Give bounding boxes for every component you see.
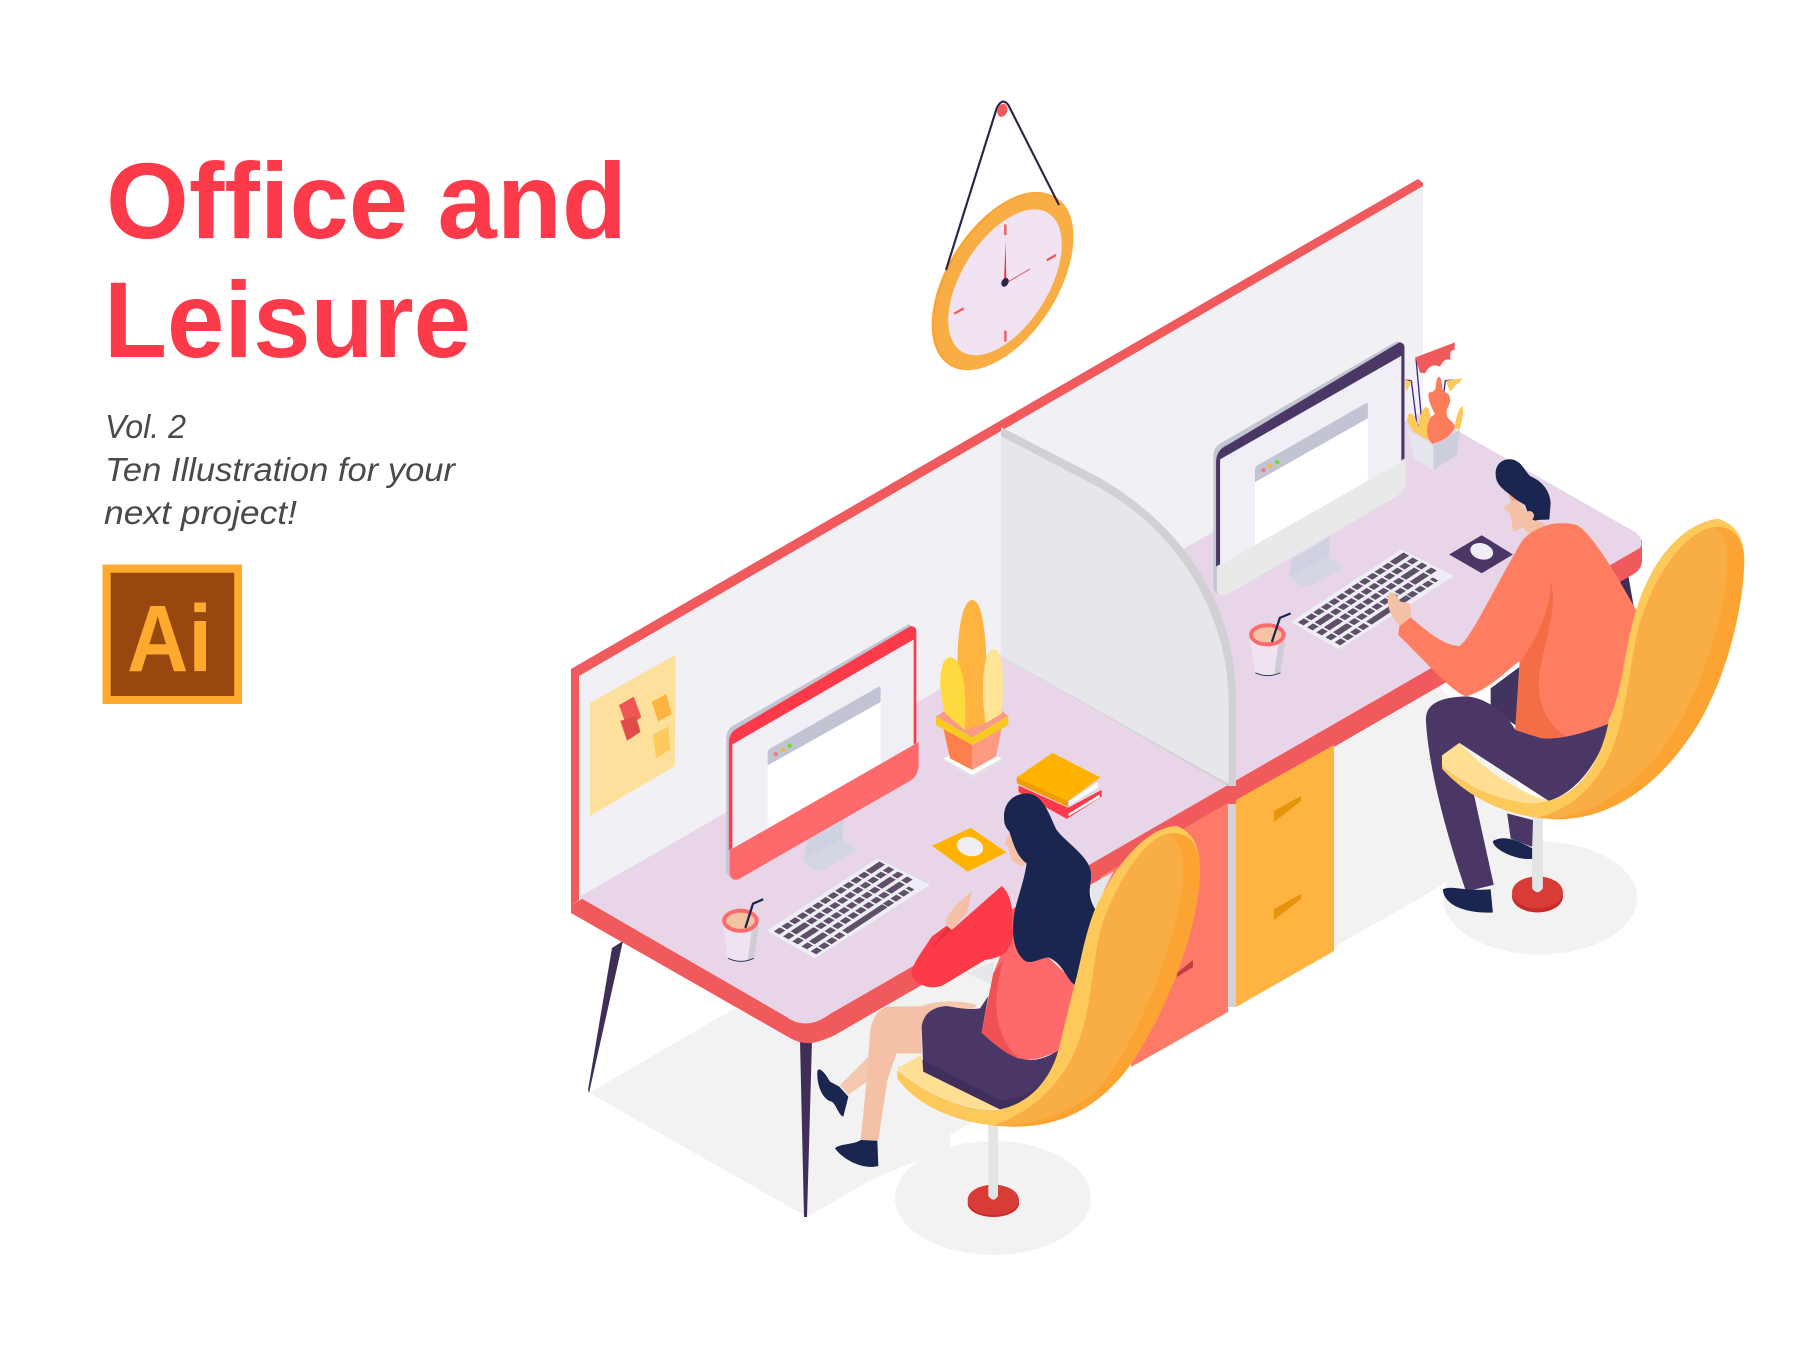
wall clock — [903, 102, 1102, 394]
chair shell — [1442, 519, 1744, 819]
blouse — [982, 923, 1078, 1060]
back wall — [579, 184, 1423, 897]
sleeve — [912, 886, 1013, 987]
chair shell — [897, 826, 1200, 1127]
partition panel — [1001, 427, 1236, 786]
books — [1017, 753, 1102, 819]
drink cup — [722, 899, 763, 961]
near lower leg and shoe — [1426, 720, 1494, 913]
seat — [897, 1055, 1000, 1109]
sweater — [1398, 523, 1640, 739]
right keyboard — [1291, 549, 1454, 649]
left workstation objects — [590, 624, 1102, 961]
hair — [1004, 793, 1097, 985]
seat — [1442, 743, 1549, 804]
subtitle text: Vol. 2 — [105, 408, 186, 445]
man in chair — [1388, 519, 1744, 913]
purple monitor — [1213, 341, 1406, 595]
left keyboard — [767, 858, 930, 958]
subtitle text: next project! — [104, 494, 297, 531]
trousers — [1426, 666, 1613, 801]
face — [1005, 832, 1027, 867]
skirt — [922, 996, 1063, 1109]
title — [104, 140, 627, 380]
woman in chair — [817, 793, 1200, 1217]
stool — [1512, 813, 1563, 913]
monitor stand — [1290, 537, 1344, 587]
floor shadows — [589, 686, 1637, 1255]
hand — [946, 891, 972, 930]
drink cup — [1249, 613, 1291, 676]
desk legs — [588, 574, 1634, 1217]
right workstation objects — [1213, 341, 1513, 676]
icon: Adobe Illustrator badge — [102, 564, 242, 704]
desk — [571, 411, 1642, 1043]
title: Leisure — [104, 259, 471, 380]
shoes — [817, 1069, 878, 1167]
man head — [1496, 459, 1551, 534]
icon: Adobe Illustrator badge: Ai — [127, 586, 212, 692]
pinboard with notes — [590, 655, 676, 816]
red wall frame — [571, 179, 1423, 905]
title: Office and — [106, 140, 627, 261]
red monitor — [726, 624, 919, 880]
panel seen behind woman — [967, 872, 1113, 985]
far leg — [1493, 813, 1533, 859]
yellow drawers — [1228, 745, 1334, 1007]
mouse pad and mouse — [932, 828, 1007, 872]
monitor stand — [802, 819, 856, 870]
coral drawers — [1100, 803, 1228, 1067]
mouse pad and mouse — [1449, 535, 1513, 573]
cactus plant — [936, 600, 1008, 778]
stool — [968, 1125, 1019, 1217]
subtitle text: Ten Illustration for your — [105, 451, 457, 488]
hand — [1388, 593, 1411, 626]
legs — [840, 1001, 977, 1140]
flag plant in pot — [1405, 342, 1463, 470]
subtitle text — [104, 408, 457, 531]
